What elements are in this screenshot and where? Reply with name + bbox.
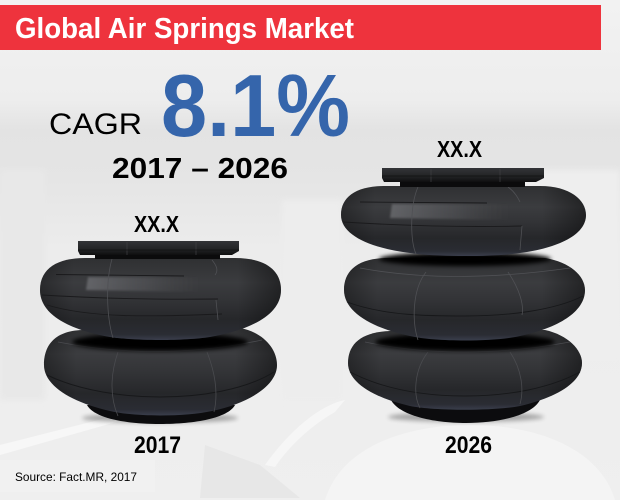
middle bellows bbox=[344, 258, 585, 340]
ground shadow bbox=[82, 413, 238, 423]
lower bellows bbox=[44, 328, 277, 416]
air spring 2017 bbox=[40, 241, 281, 424]
title banner bbox=[0, 5, 601, 50]
foot bbox=[87, 405, 235, 424]
year label 2026: 2026 bbox=[445, 432, 492, 459]
foot bbox=[391, 400, 540, 423]
bottom bellows bbox=[348, 330, 582, 410]
CAGR value: 8.1% bbox=[161, 56, 350, 155]
air spring 2026 bbox=[341, 168, 586, 423]
source note: Source: Fact.MR, 2017 bbox=[15, 470, 137, 484]
ground shadow bbox=[388, 412, 544, 422]
year label 2017: 2017 bbox=[134, 432, 181, 459]
top plate bbox=[382, 168, 544, 187]
middle neck shadow bbox=[379, 252, 551, 266]
top plate bbox=[78, 241, 239, 259]
upper bellows bbox=[40, 258, 281, 340]
bottom neck shadow bbox=[375, 333, 555, 351]
CAGR label: CAGR bbox=[49, 108, 142, 141]
title: Global Air Springs Market bbox=[15, 13, 354, 45]
value label 2017: XX.X bbox=[134, 211, 180, 237]
top bellows bbox=[341, 186, 586, 256]
value label 2026: XX.X bbox=[437, 136, 483, 162]
CAGR period: 2017 – 2026 bbox=[112, 153, 288, 185]
neck shadow bbox=[72, 333, 248, 351]
